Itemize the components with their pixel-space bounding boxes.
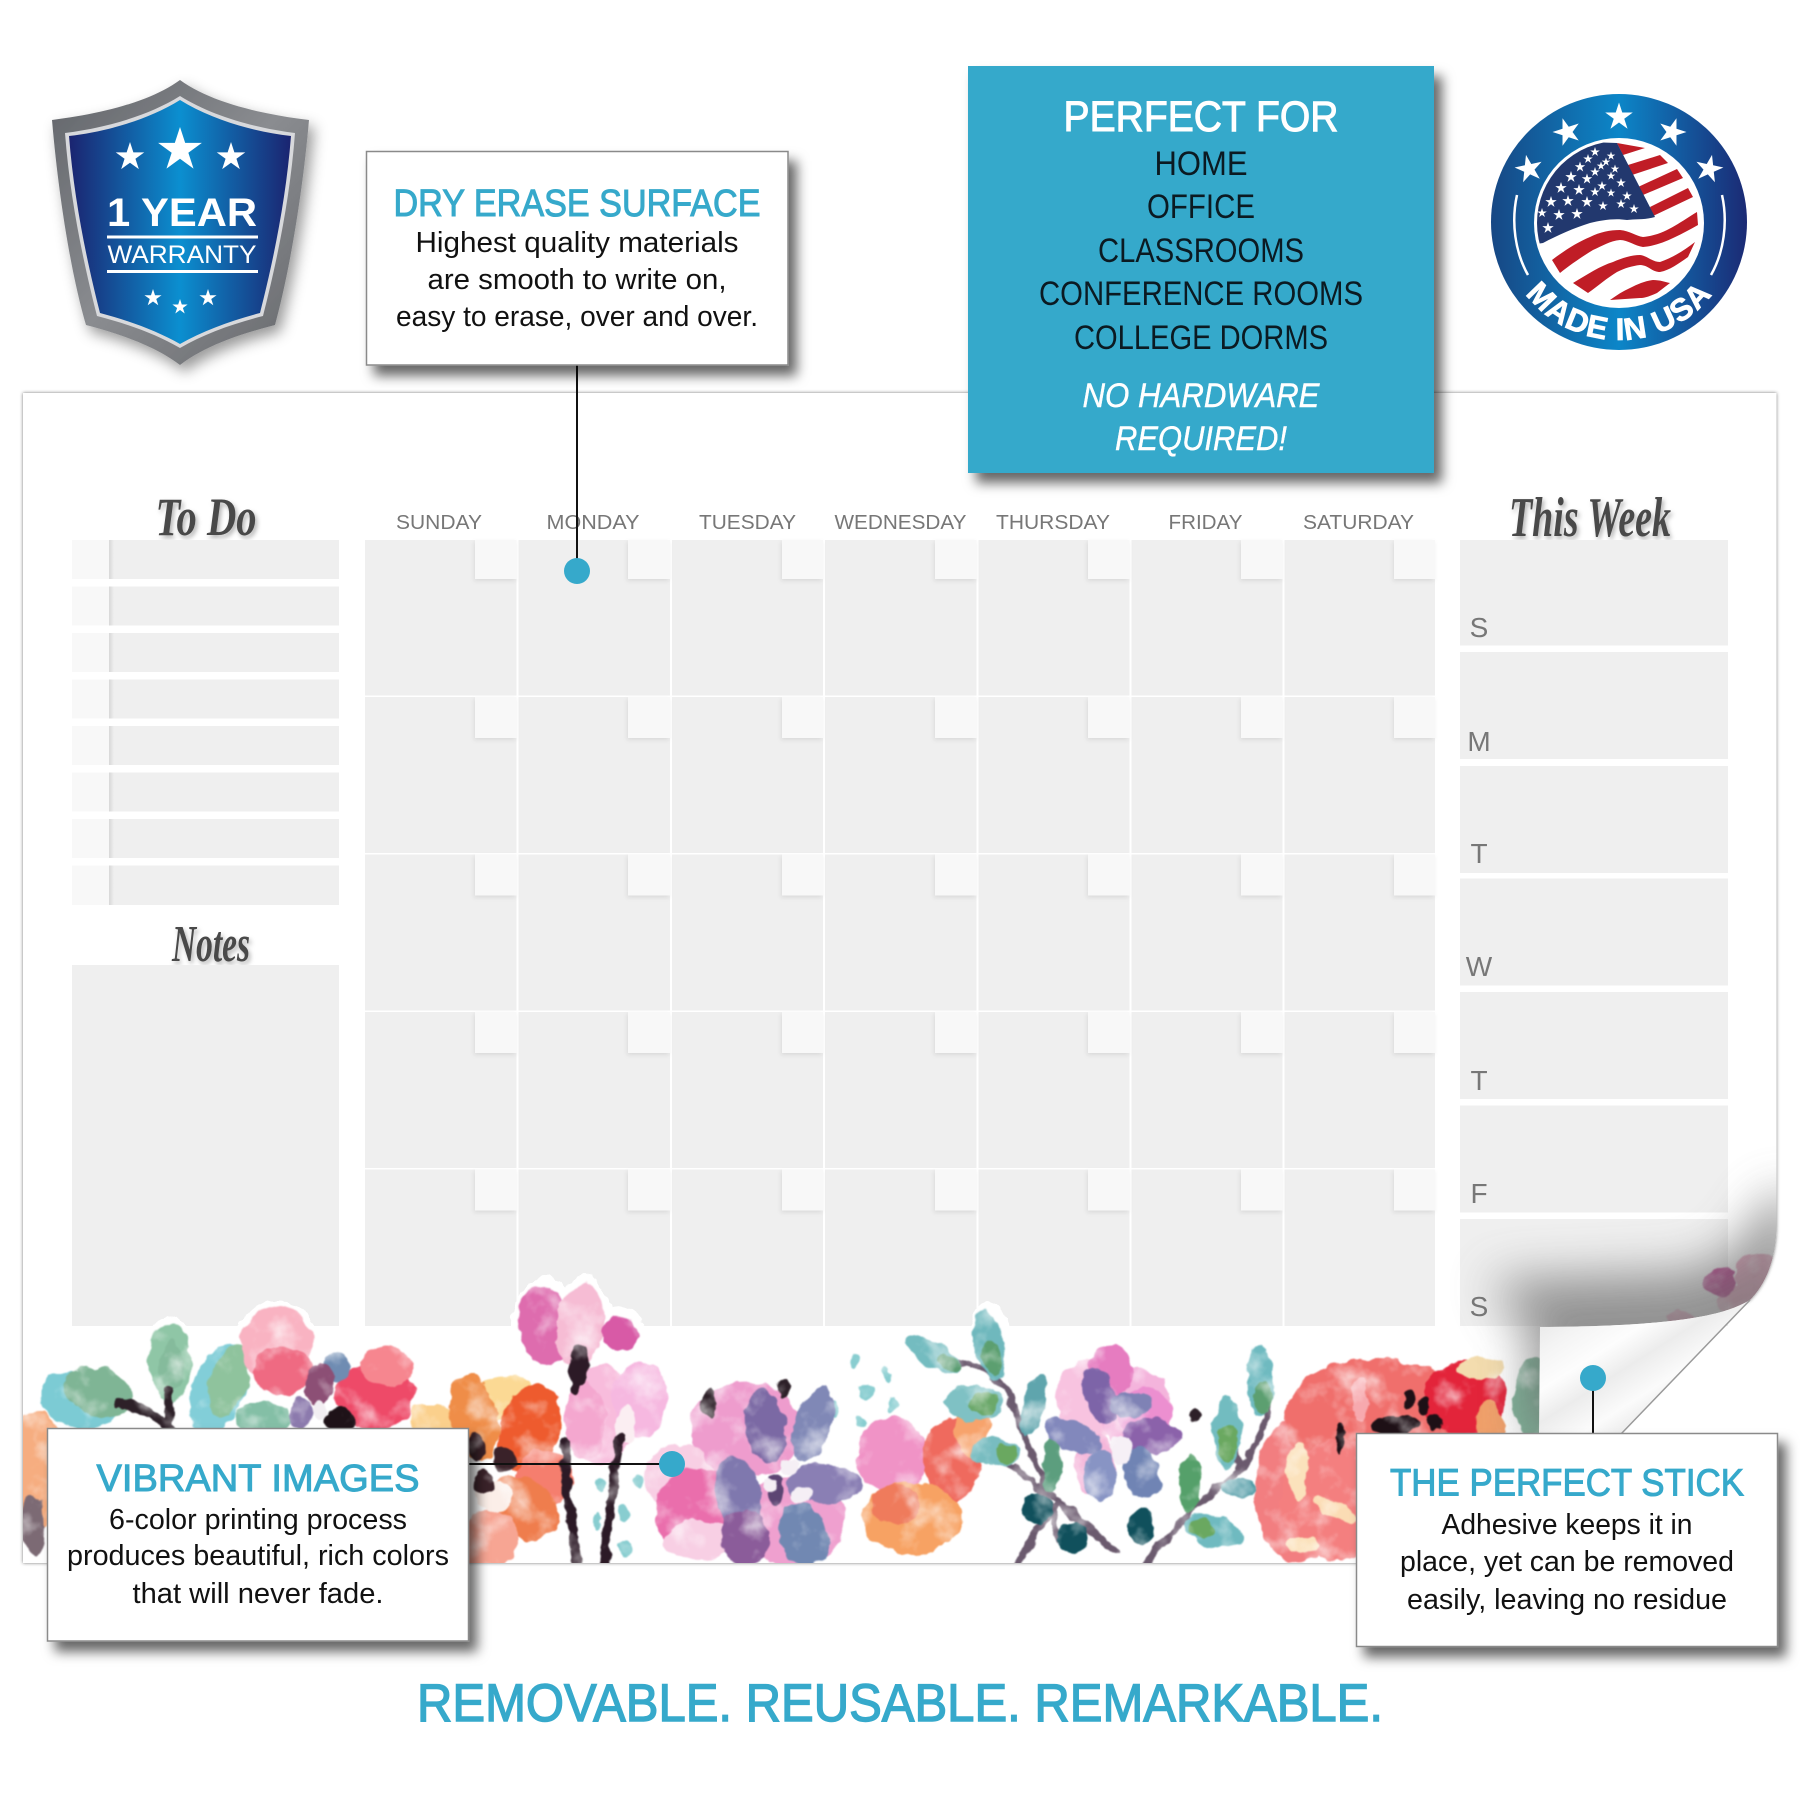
callout: The Perfect Stick: THE PERFECT STICK bbox=[1390, 1462, 1744, 1504]
callout: Dry Erase Surface: DRY ERASE SURFACE bbox=[394, 183, 760, 225]
callout: Vibrant Images: VIBRANT IMAGES bbox=[96, 1458, 420, 1500]
panel: Perfect For bbox=[968, 66, 1434, 473]
callout connector: vibrant images bbox=[469, 1451, 685, 1477]
heading: Notes: Notes bbox=[171, 916, 250, 973]
this week column: W bbox=[1466, 951, 1493, 982]
this week column: M bbox=[1467, 726, 1491, 757]
curl shadow on sheet bbox=[1490, 1195, 1800, 1440]
callout: The Perfect Stick bbox=[1356, 1434, 1778, 1646]
notes box bbox=[72, 965, 339, 1326]
callout: Dry Erase Surface bbox=[366, 152, 788, 365]
calendar grid bbox=[365, 540, 1435, 1326]
weekday headers: TUESDAY bbox=[699, 512, 796, 534]
large coral rose bbox=[1254, 1356, 1507, 1562]
weekday headers: MONDAY bbox=[546, 512, 640, 534]
callout: Vibrant Images: 6-color printing process bbox=[109, 1504, 407, 1536]
right branch with leaves bbox=[1129, 1344, 1273, 1562]
marker dot: surface bbox=[564, 558, 590, 584]
panel: Perfect For: REQUIRED! bbox=[1115, 420, 1287, 458]
panel: Perfect For: COLLEGE DORMS bbox=[1074, 319, 1328, 357]
warranty shield badge bbox=[52, 80, 309, 365]
weekday headers: SUNDAY bbox=[396, 512, 482, 534]
panel: Perfect For: NO HARDWARE bbox=[1082, 377, 1320, 415]
marker dot: images bbox=[659, 1451, 685, 1477]
weekday headers: FRIDAY bbox=[1168, 512, 1242, 534]
flowers on curled corner bbox=[1667, 1252, 1778, 1328]
second purple flower bbox=[1038, 1344, 1200, 1502]
left branch with leaves bbox=[904, 1308, 1121, 1563]
callout connector: perfect stick bbox=[1580, 1365, 1606, 1434]
weekday headers: THURSDAY bbox=[996, 512, 1110, 534]
callout connector: dry erase bbox=[564, 365, 590, 584]
badge arc text: MADE IN USA bbox=[1526, 280, 1712, 340]
green leaf behind peel bbox=[1514, 1356, 1554, 1440]
purple flower with pink wash bbox=[644, 1378, 863, 1572]
tagline: REMOVABLE. REUSABLE. REMARKABLE. bbox=[417, 1674, 1383, 1733]
teal droplets bbox=[594, 1354, 898, 1556]
callout: Dry Erase Surface: easy to erase, over and over. bbox=[396, 301, 758, 333]
weekday headers: WEDNESDAY bbox=[834, 512, 966, 534]
callout: Vibrant Images: that will never fade. bbox=[132, 1578, 384, 1610]
this week column: T bbox=[1470, 1065, 1488, 1096]
panel: wall calendar sheet bbox=[23, 393, 1776, 1563]
shield stars bbox=[116, 127, 245, 313]
left leaves bbox=[40, 1322, 292, 1428]
far-left orange flower bbox=[23, 1410, 58, 1558]
peeled corner flap bbox=[1539, 1300, 1750, 1434]
this week column: S bbox=[1470, 1291, 1488, 1322]
callout: The Perfect Stick: easily, leaving no residue bbox=[1407, 1584, 1727, 1616]
this week column: S bbox=[1470, 612, 1488, 643]
painted blooms and leaves bbox=[3, 1252, 1778, 1590]
warranty text bbox=[107, 191, 258, 273]
marker dot: adhesive bbox=[1580, 1365, 1606, 1391]
orange flower bbox=[408, 1371, 573, 1570]
callout: The Perfect Stick: Adhesive keeps it in bbox=[1442, 1509, 1692, 1541]
callout: Dry Erase Surface: are smooth to write on, bbox=[428, 264, 726, 296]
pink tulip flowers and stems bbox=[511, 1280, 668, 1565]
this week column: F bbox=[1470, 1178, 1488, 1209]
warranty text: WARRANTY bbox=[108, 241, 257, 269]
callout: Vibrant Images bbox=[48, 1428, 468, 1641]
this week column: T bbox=[1470, 838, 1488, 869]
heading: To Do: To Do bbox=[156, 487, 256, 547]
weekday headers bbox=[396, 512, 1414, 534]
panel: Perfect For: OFFICE bbox=[1147, 188, 1255, 226]
warranty text: 1 YEAR bbox=[107, 191, 257, 235]
to do lines bbox=[72, 540, 339, 905]
panel: Perfect For: CLASSROOMS bbox=[1098, 232, 1304, 270]
watercolor floral border bbox=[3, 1252, 1778, 1590]
heading: This Week: This Week bbox=[1509, 487, 1671, 549]
pink and orange flower bbox=[857, 1404, 990, 1554]
callout: Dry Erase Surface: Highest quality materials bbox=[416, 227, 738, 259]
white halo behind flowers bbox=[153, 1273, 1010, 1326]
panel: Perfect For: PERFECT FOR bbox=[1064, 93, 1338, 141]
made in USA badge bbox=[1491, 94, 1747, 350]
panel: Perfect For: CONFERENCE ROOMS bbox=[1039, 275, 1363, 313]
this week column bbox=[1460, 540, 1728, 1326]
callout: The Perfect Stick: place, yet can be removed bbox=[1400, 1546, 1734, 1578]
flag roundel bbox=[1530, 138, 1704, 308]
panel: Perfect For: HOME bbox=[1154, 145, 1248, 183]
left red flower bbox=[240, 1307, 415, 1432]
weekday headers: SATURDAY bbox=[1303, 512, 1414, 534]
badge stars bbox=[1512, 102, 1726, 183]
callout: Vibrant Images: produces beautiful, rich colors bbox=[67, 1540, 449, 1572]
